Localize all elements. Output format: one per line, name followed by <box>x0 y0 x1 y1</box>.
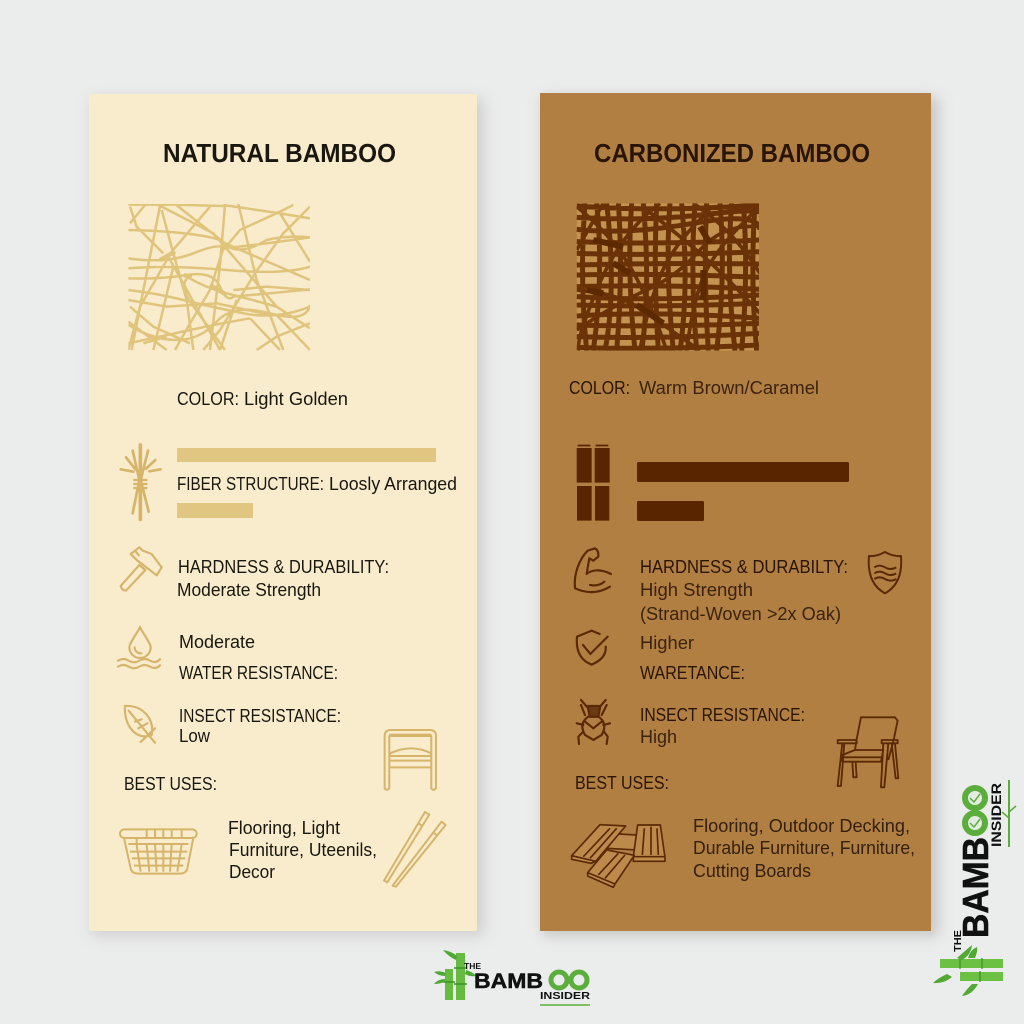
text: insect resistance: Low <box>179 725 211 746</box>
heading: best uses: BEST USES: <box>575 772 669 793</box>
text: natural uses <box>228 817 377 882</box>
logo: bottom center: BAMB <box>474 970 543 993</box>
text: insect resistance: High <box>640 726 677 747</box>
text: color: Light Golden <box>244 388 348 409</box>
icon: armchair <box>838 717 898 787</box>
text: color: COLOR: <box>569 377 630 398</box>
logo: right side rotated <box>933 780 1016 996</box>
text: carbonized uses <box>693 815 915 881</box>
text: water resistance: WATER RESISTANCE: <box>179 662 338 683</box>
text: fiber structure: Loosly Arranged <box>329 473 457 494</box>
logo: right side rotated: THE <box>953 930 964 952</box>
text: water resistance: Moderate <box>179 631 255 652</box>
text: natural uses: Flooring, Light <box>228 817 340 838</box>
text: water resistance: Higher <box>640 632 694 653</box>
panel: carbonized bamboo <box>540 93 931 931</box>
text: water resistance <box>179 631 338 683</box>
text: carbonized uses: Cutting Boards <box>693 860 811 881</box>
text: hardness <box>640 556 848 624</box>
panel: natural bamboo <box>89 94 477 931</box>
text: hardness: HARDNESS & DURABILITY: <box>178 556 389 577</box>
chart: dense fiber pattern <box>577 203 763 351</box>
icon: fiber bundle <box>121 445 161 519</box>
logo: bottom center: INSIDER <box>540 991 591 1002</box>
chart: loose fiber pattern <box>128 204 310 350</box>
text: natural uses: Furniture, Uteenils, <box>229 839 377 860</box>
text: water resistance: WARETANCE: <box>640 662 745 683</box>
text: hardness: HARDNESS & DURABILTY: <box>640 556 848 577</box>
icon: water shield <box>869 552 901 593</box>
text: color: Warm Brown/Caramel <box>639 377 819 398</box>
icon: planks <box>572 825 665 887</box>
icon: chopsticks <box>384 812 446 887</box>
bar: fiber bottom <box>177 503 253 518</box>
heading: carbonized bamboo: CARBONIZED BAMBOO <box>594 138 870 168</box>
text: water resistance <box>640 632 745 683</box>
logo: right side rotated: INSIDER <box>988 783 1004 847</box>
text: natural uses: Decor <box>229 861 275 882</box>
text: hardness: Moderate Strength <box>177 579 321 600</box>
heading: best uses: BEST USES: <box>124 773 217 794</box>
logo: right side rotated: BAMB <box>955 837 996 938</box>
text: carbonized uses: Durable Furniture, Furniture, <box>693 837 915 858</box>
text: insect resistance <box>179 705 341 746</box>
text: color: COLOR: <box>177 388 239 409</box>
text: carbonized uses: Flooring, Outdoor Decking, <box>693 815 910 836</box>
text: insect resistance: INSECT RESISTANCE: <box>640 704 805 725</box>
heading: natural bamboo: NATURAL BAMBOO <box>163 138 396 168</box>
bar: fiber top <box>177 448 436 462</box>
icon: insect <box>577 700 610 744</box>
text: insect resistance <box>640 704 805 747</box>
icon: check shield <box>577 631 608 665</box>
bar: fiber top <box>637 462 849 482</box>
icon: bamboo chair <box>385 730 436 790</box>
icon: leaf <box>125 706 155 743</box>
text: fiber structure: FIBER STRUCTURE: <box>177 473 324 494</box>
text: hardness: High Strength <box>640 579 753 600</box>
logo: bottom center <box>434 950 591 1005</box>
text: hardness <box>177 556 389 600</box>
icon: basket <box>120 829 197 874</box>
icon: water drop <box>118 627 160 668</box>
text: insect resistance: INSECT RESISTANCE: <box>179 705 341 726</box>
logo: bottom center: THE <box>464 962 482 971</box>
icon: flexed arm <box>575 548 611 592</box>
icon: bamboo poles <box>577 445 610 521</box>
text: hardness: (Strand-Woven >2x Oak) <box>640 603 841 624</box>
icon: hammer <box>121 547 162 591</box>
text: fiber structure <box>177 473 457 494</box>
bar: fiber bottom <box>637 501 704 521</box>
text: color <box>177 388 348 409</box>
